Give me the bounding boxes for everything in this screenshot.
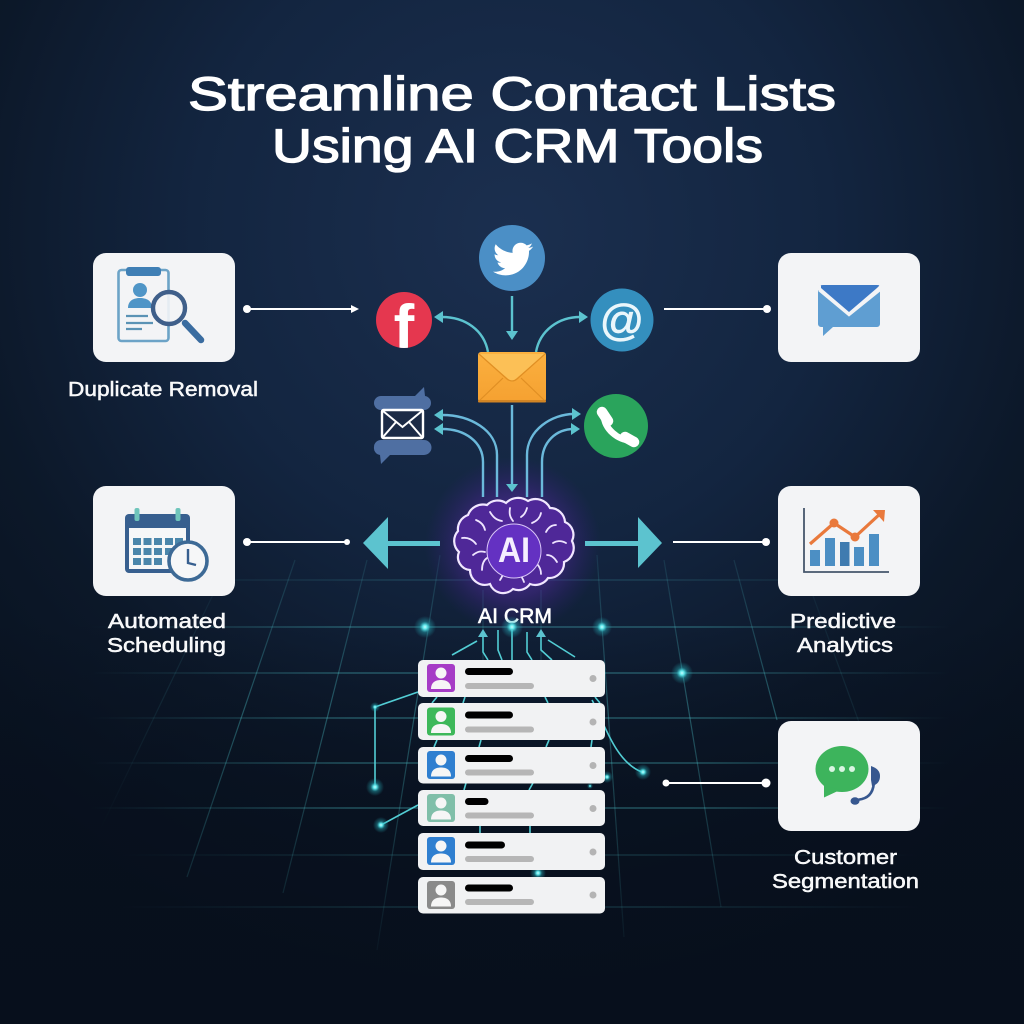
icon: twitter [479, 225, 545, 291]
arrows: into AI core [434, 405, 581, 497]
icon: facebook: f [394, 293, 415, 362]
title [188, 67, 836, 172]
icon: orange envelope [478, 352, 546, 402]
contact list [418, 660, 605, 914]
connector: customer segmentation [662, 778, 770, 788]
icon: phone [584, 394, 648, 458]
panel: automated scheduling [93, 486, 235, 596]
label: automated scheduling [107, 610, 226, 657]
contact row 4 [418, 790, 605, 826]
glow: AI core [425, 457, 601, 633]
connector: predictive analytics [673, 538, 770, 546]
label: predictive analytics [790, 610, 896, 657]
icon: at sign [590, 288, 654, 352]
label: customer segmentation [772, 846, 919, 893]
label: predictive analytics: Analytics [797, 634, 893, 657]
icon: at sign: @ [600, 296, 644, 345]
label: AI CRM: AI CRM [478, 605, 552, 628]
label: automated scheduling: Automated [108, 610, 226, 633]
label: customer segmentation: Customer [794, 846, 897, 869]
label: duplicate removal: Duplicate Removal [68, 378, 258, 401]
contact row 1 [418, 660, 605, 697]
circuit lines [375, 629, 642, 833]
contact row 5 [418, 833, 605, 870]
glowing nodes [366, 616, 693, 881]
perspective grid [90, 555, 950, 950]
arrow: right output [585, 517, 662, 568]
contact row 6 [418, 877, 605, 914]
icon: mail chat [374, 387, 432, 464]
panel: predictive analytics [778, 486, 920, 596]
arrow: envelope to facebook [434, 311, 488, 352]
panel: duplicate removal [93, 253, 235, 362]
icon: calendar with clock [125, 508, 207, 580]
icon: clipboard with magnifier [118, 267, 201, 341]
arrow: envelope to at sign [536, 311, 588, 352]
label: predictive analytics: Predictive [790, 610, 896, 633]
icon: chart [804, 508, 889, 572]
label: customer segmentation: Segmentation [772, 870, 919, 893]
title: Streamline Contact Lists [188, 67, 836, 120]
icon: mail bubble [818, 285, 880, 336]
icon: facebook [376, 292, 432, 348]
contact row 3 [418, 747, 605, 784]
label: automated scheduling: Scheduling [107, 634, 226, 657]
icon: AI brain [454, 498, 574, 593]
arrow: left output [363, 517, 440, 569]
contact row 2 [418, 703, 605, 740]
connector: duplicate removal [243, 305, 359, 313]
connector: automated scheduling [243, 538, 350, 546]
icon: chat headset [816, 746, 880, 805]
title: Using AI CRM Tools [272, 119, 763, 172]
icon: AI brain: AI [498, 531, 530, 570]
panel: customer segmentation [778, 721, 920, 831]
arrow: twitter to envelope [506, 296, 518, 340]
panel: email [778, 253, 920, 362]
connector: email [664, 305, 771, 313]
